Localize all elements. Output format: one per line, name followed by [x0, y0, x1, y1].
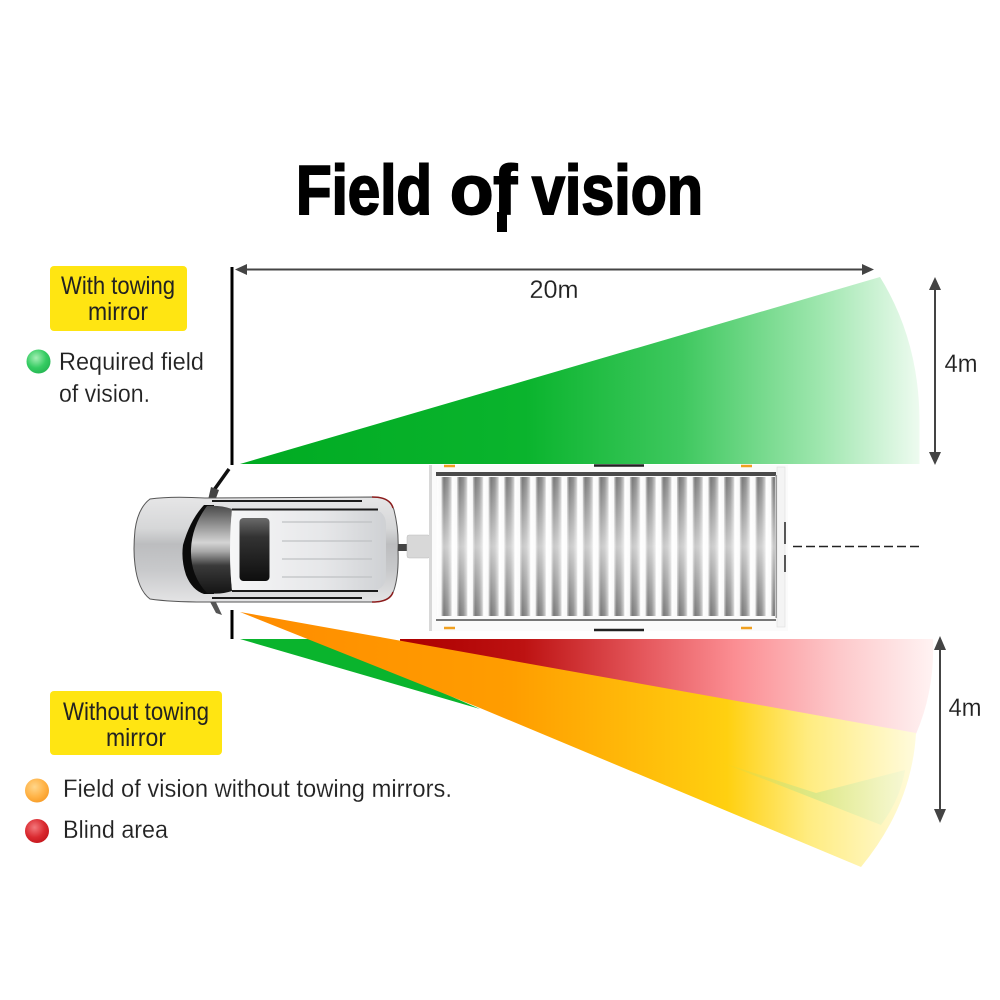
field: required upper green: [240, 277, 920, 464]
centre dashed line: [793, 546, 923, 548]
legend: blind area: Blind area: [63, 816, 168, 844]
top rail: [436, 472, 776, 476]
dimension: upper 4m: [929, 277, 978, 465]
rear bar: [777, 467, 785, 627]
sunroof: [240, 518, 270, 581]
legend: required field of vision: of vision.: [59, 380, 150, 408]
badge: with towing mirror: mirror: [88, 298, 148, 326]
dimension: lower 4m: 4m: [948, 694, 982, 722]
icon: upper mirror: [208, 469, 229, 501]
car body: [134, 497, 398, 602]
field: lower green sliver: [240, 639, 480, 709]
badge: with towing mirror: With towing: [61, 272, 175, 300]
dimension: lower 4m: [934, 636, 982, 823]
legend: required field of vision: Required field: [59, 348, 204, 376]
icon: lower mirror: [208, 598, 222, 615]
title: of: [450, 151, 518, 229]
dimension: 20m: 20m: [530, 276, 578, 304]
legend: required field of vision: [26, 348, 204, 408]
badge: without towing mirror: Without towing: [63, 698, 209, 726]
corrugated panels: [436, 477, 775, 616]
reference line: top: [230, 267, 234, 465]
dimension: upper 4m: 4m: [944, 350, 978, 378]
vehicle: trailer: [429, 465, 788, 631]
rear latches: [784, 522, 786, 572]
amber lights: [444, 466, 752, 628]
windscreen band: [182, 505, 214, 594]
legend: blind area: [25, 816, 168, 844]
field: blind area red: [400, 639, 933, 734]
windscreen glass: [191, 506, 232, 594]
roof ribs: [282, 522, 372, 577]
title: Field: [296, 151, 432, 229]
title: [296, 151, 703, 232]
reference line: bottom: [230, 610, 234, 639]
vehicle: car top view: [134, 469, 398, 615]
side markers: [594, 466, 644, 630]
badge: without towing mirror: mirror: [106, 724, 166, 752]
badge: with towing mirror: [50, 266, 187, 331]
bottom rail: [436, 619, 776, 621]
roof: [230, 510, 386, 590]
badge: without towing mirror: [50, 691, 222, 755]
title: vision: [532, 151, 703, 229]
field: faded green overlap: [720, 762, 905, 825]
dimension: 20m: [235, 264, 874, 304]
field: without towing mirrors orange: [240, 612, 916, 867]
tow hitch: [398, 535, 430, 558]
side rails: [212, 501, 378, 598]
legend: field of vision without towing mirrors: Field of vision without towing mirrors.: [63, 775, 452, 803]
tail lights: [372, 497, 393, 602]
